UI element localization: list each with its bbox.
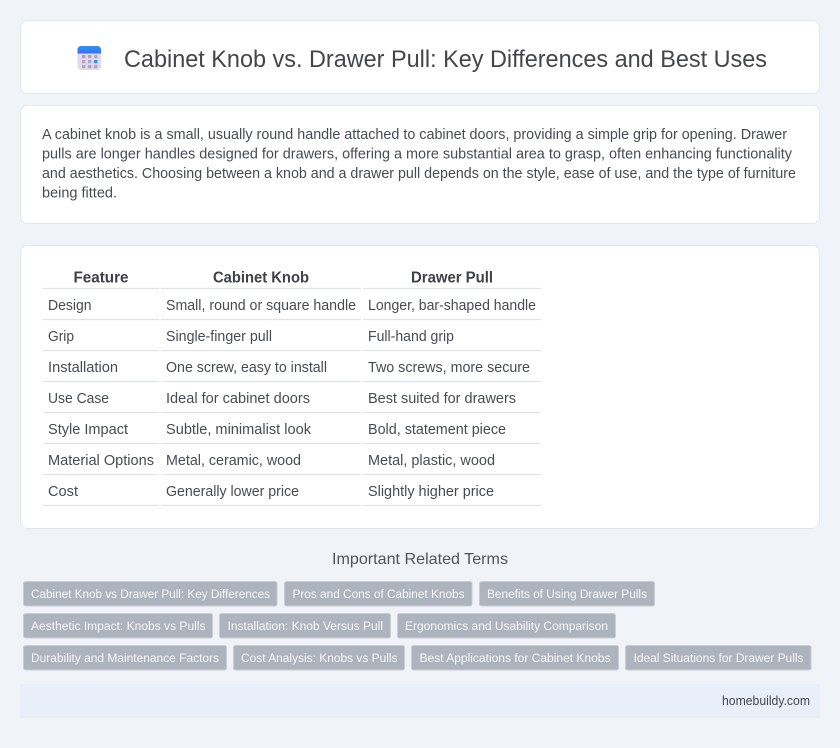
- footer text: homebuildy.com: [722, 693, 810, 708]
- table row: Material Options: Metal, plastic, wood: [368, 453, 495, 469]
- table header: Cabinet Knob: [213, 270, 309, 286]
- tag: [398, 614, 616, 638]
- title: Cabinet Knob vs. Drawer Pull: Key Differences and Best Uses: [124, 46, 767, 73]
- panel: comparison table: [20, 246, 820, 528]
- table row: Cost: Slightly higher price: [368, 484, 494, 500]
- table header: [74, 270, 493, 286]
- tag: [626, 646, 811, 670]
- tag: Ergonomics and Usability Comparison: [405, 619, 608, 633]
- tag: [220, 614, 390, 638]
- tag: Cabinet Knob vs Drawer Pull: Key Differences: [31, 587, 270, 601]
- table row: Installation: Two screws, more secure: [368, 360, 530, 376]
- tag: Benefits of Using Drawer Pulls: [487, 587, 647, 601]
- table row: Material Options: [48, 453, 495, 469]
- tag: Pros and Cons of Cabinet Knobs: [292, 587, 464, 601]
- table row: Use Case: Best suited for drawers: [368, 391, 516, 407]
- tag: [234, 646, 404, 670]
- tag: Cost Analysis: Knobs vs Pulls: [241, 651, 398, 665]
- tag: [284, 582, 472, 606]
- table row: Style Impact: Subtle, minimalist look: [166, 422, 312, 438]
- table row: Installation: [48, 360, 530, 376]
- footer: [20, 684, 820, 718]
- table row: Material Options: Material Options: [48, 453, 154, 469]
- table header: Drawer Pull: [411, 270, 493, 286]
- table row: Grip: Grip: [48, 329, 74, 345]
- table row: Design: Longer, bar-shaped handle: [368, 298, 536, 314]
- text block: description: and aesthetics. Choosing between a knob and a drawer pull depends on the style, ease of use, and the type of furniture: [42, 166, 796, 182]
- panel: header: [20, 20, 820, 94]
- tag: [412, 646, 618, 670]
- table row: Use Case: Ideal for cabinet doors: [166, 391, 310, 407]
- table row: Cost: Generally lower price: [166, 484, 299, 500]
- heading: related terms: Important Related Terms: [332, 551, 508, 568]
- text block: description: being fitted.: [42, 186, 117, 202]
- table row: Use Case: [48, 391, 516, 407]
- tag: Aesthetic Impact: Knobs vs Pulls: [31, 619, 206, 633]
- table row: Style Impact: Bold, statement piece: [368, 422, 506, 438]
- table row: Material Options: Metal, ceramic, wood: [166, 453, 301, 469]
- table row: Installation: One screw, easy to install: [166, 360, 327, 376]
- text block: description: pulls are longer handles designed for drawers, offering a more substantial area to grasp, often enhancing functionality: [42, 146, 793, 162]
- panel: description: [20, 106, 820, 224]
- tag: [24, 582, 277, 606]
- table row: Use Case: Use Case: [48, 391, 109, 407]
- icon: calendar: [78, 46, 101, 70]
- tag: Ideal Situations for Drawer Pulls: [634, 651, 804, 665]
- table row: Style Impact: [48, 422, 506, 438]
- tag: Installation: Knob Versus Pull: [228, 619, 383, 633]
- tag: [480, 582, 654, 606]
- related term tags: [24, 582, 811, 670]
- tag: [24, 646, 226, 670]
- table row: Design: Design: [48, 298, 92, 314]
- table row: Design: [48, 298, 536, 314]
- table row: Grip: Full-hand grip: [368, 329, 454, 345]
- table row: Grip: [48, 329, 454, 345]
- text block: description: [42, 127, 796, 202]
- table row: Style Impact: Style Impact: [48, 422, 128, 438]
- tag: Durability and Maintenance Factors: [31, 651, 219, 665]
- table row: Design: Small, round or square handle: [166, 298, 356, 314]
- table row: Grip: Single-finger pull: [166, 329, 272, 345]
- table header: Feature: [74, 270, 129, 286]
- tag: [24, 614, 212, 638]
- table row: Installation: Installation: [48, 360, 118, 376]
- table row: Cost: [48, 484, 494, 500]
- text block: description: A cabinet knob is a small, usually round handle attached to cabinet doors, providing a simple grip for opening. Drawer: [42, 127, 787, 143]
- table row: Cost: Cost: [48, 484, 78, 500]
- tag: Best Applications for Cabinet Knobs: [420, 651, 610, 665]
